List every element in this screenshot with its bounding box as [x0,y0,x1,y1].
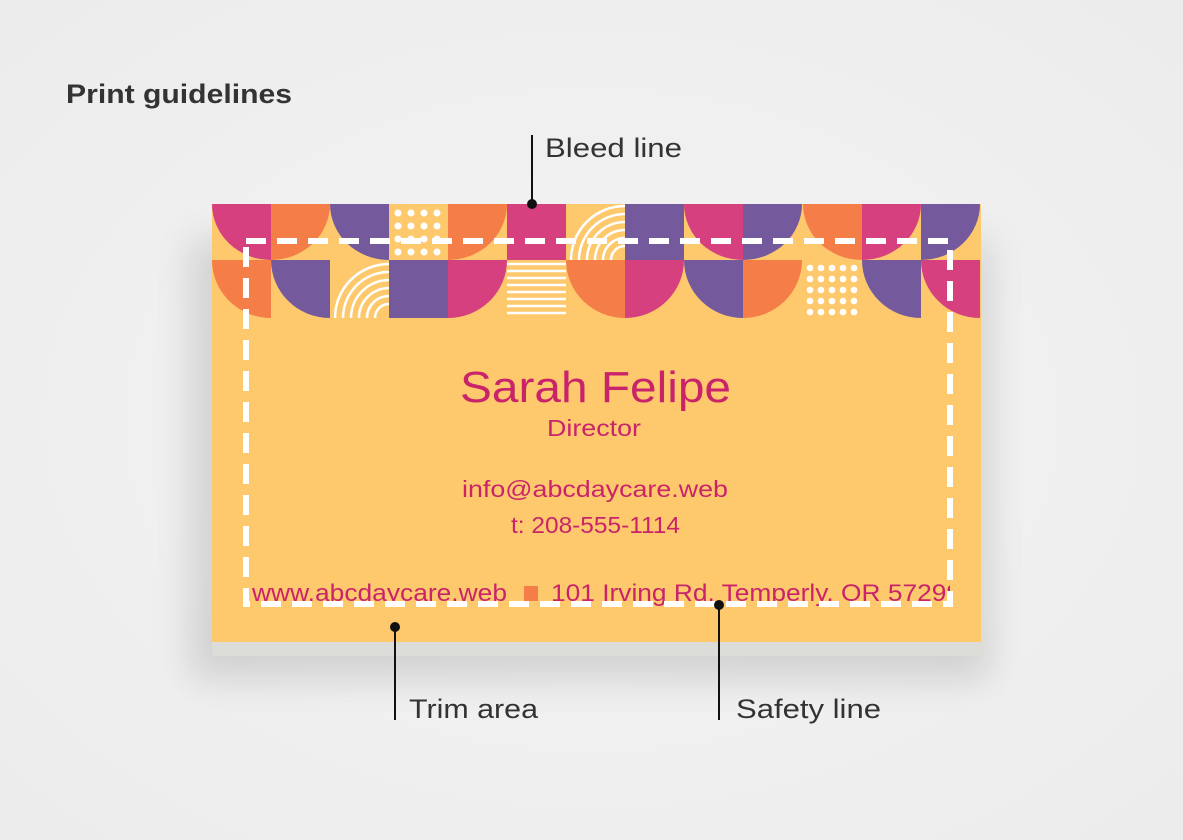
card shadow [190,240,990,680]
callout: bleed line: Bleed line [545,133,682,163]
email: info@abcdaycare.web [462,476,728,502]
title: Print guidelines [66,79,292,109]
footer line: www.abcdaycare.web [251,580,507,607]
callout: bleed line [527,133,682,209]
callout: trim area [390,622,539,724]
business card [212,204,981,642]
card stack edge [212,630,981,656]
job title: Director [547,415,641,441]
phone: t: 208-555-1114 [511,512,680,538]
name: Sarah Felipe [460,363,731,412]
callout: safety line: Safety line [736,694,881,724]
footer line [252,584,950,606]
footer line: 101 Irving Rd. Temperly, OR 57299 [551,580,961,607]
callout: safety line [714,600,881,724]
callout: trim area: Trim area [409,694,539,724]
safety dashed line [246,241,950,604]
pattern band [212,204,980,318]
